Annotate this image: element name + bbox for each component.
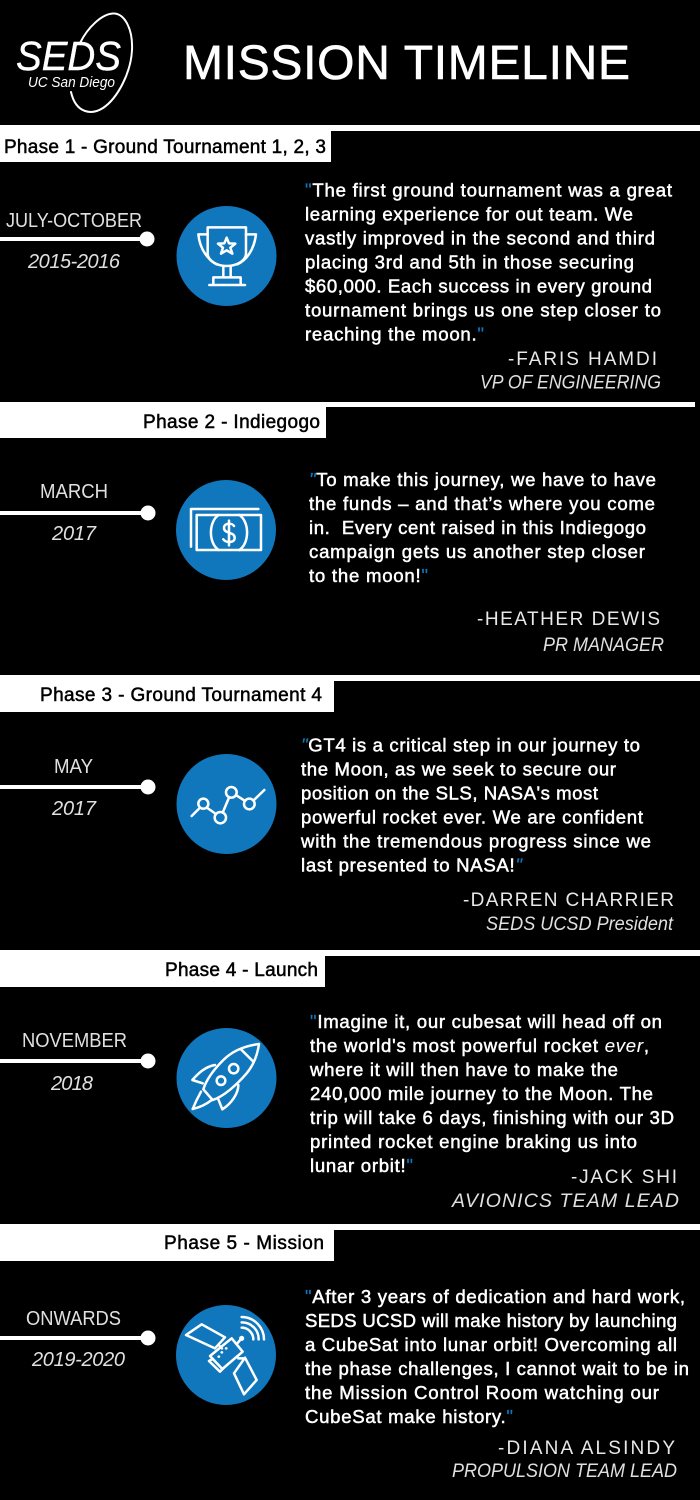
phase 2 quote: campaign gets us another step closer: [309, 541, 645, 562]
icon: rocket: [176, 1028, 276, 1128]
phase 3 heading bar: [0, 675, 700, 712]
panel: phase 2: [0, 402, 695, 656]
phase 5 quote: the Mission Control Room watching our: [305, 1382, 659, 1403]
phase 2 quote: [309, 469, 656, 586]
phase 5 quote: a CubeSat into lunar orbit! Overcoming all: [305, 1334, 677, 1355]
phase 3 quote: powerful rocket ever. We are confident: [301, 806, 644, 828]
phase 4 attribution: -JACK SHI: [571, 1167, 677, 1188]
icon: line chart: [176, 754, 276, 854]
phase 4 quote: [309, 1011, 674, 1176]
phase 3 quote: with the tremendous progress since we: [300, 830, 651, 852]
phase 2 attribution: -HEATHER DEWIS: [477, 609, 660, 630]
phase 4 quote: trip will take 6 days, finishing with our 3D: [310, 1107, 674, 1128]
phase 2 quote: "To make this journey, we have to have: [309, 469, 656, 490]
phase 5 attribution: -DIANA ALSINDY: [498, 1438, 675, 1459]
panel: phase 3: [0, 675, 700, 935]
phase 3 date marker: [0, 756, 156, 820]
phase 5 heading bar: Phase 5 - Mission: [164, 1233, 324, 1254]
phase 1 attribution: [480, 349, 661, 394]
phase 4 heading bar: Phase 4 - Launch: [165, 960, 318, 981]
phase 5 quote: [305, 1286, 689, 1427]
phase 1 quote: vastly improved in the second and third: [305, 228, 655, 248]
phase 1 quote: tournament brings us one step closer to: [305, 300, 661, 320]
phase 5 quote: CubeSat make history.": [305, 1406, 513, 1427]
phase 4 quote: 240,000 mile journey to the Moon. The: [310, 1083, 653, 1104]
phase 5 date marker: ONWARDS: [26, 1308, 121, 1330]
phase 2 quote: in. Every cent raised in this Indiegogo: [309, 517, 646, 538]
phase 4 quote: "Imagine it, our cubesat will head off on: [310, 1011, 662, 1032]
phase 4 quote: the world's most powerful rocket ever,: [310, 1035, 649, 1056]
phase 2 quote: to the moon!": [309, 565, 428, 586]
phase 1 quote: "The first ground tournament was a great: [305, 180, 673, 200]
phase 1 date marker: JULY-OCTOBER: [6, 210, 142, 232]
phase 2 date marker: [0, 481, 156, 545]
phase 3 date marker: MAY: [54, 756, 93, 778]
phase 5 heading bar: [0, 1224, 700, 1261]
phase 5 date marker: 2019-2020: [31, 1349, 125, 1371]
phase 3 attribution: [463, 890, 674, 935]
phase 5 date marker: [0, 1308, 156, 1371]
phase 2 date marker: 2017: [51, 523, 97, 545]
phase 1 quote: $60,000. Each success in every ground: [305, 276, 652, 296]
phase 2 date marker: MARCH: [40, 481, 108, 503]
panel: phase 4: [0, 950, 700, 1212]
phase 4 quote: where it will then have to make the: [309, 1059, 618, 1080]
phase 2 heading bar: [0, 402, 695, 438]
phase 1 date marker: 2015-2016: [27, 251, 121, 273]
phase 4 quote: printed rocket engine braking us into: [310, 1131, 637, 1152]
phase 3 quote: last presented to NASA!": [301, 854, 523, 876]
phase 5 attribution: [452, 1438, 677, 1482]
phase 2 quote: the funds – and that’s where you come: [309, 493, 655, 514]
phase 3 attribution: -DARREN CHARRIER: [463, 890, 674, 911]
phase 1 attribution: VP OF ENGINEERING: [480, 372, 661, 394]
icon: money: [176, 480, 276, 580]
phase 1 heading bar: [0, 125, 700, 162]
logo: SEDS UC San Diego: UC San Diego: [28, 74, 115, 91]
phase 5 attribution: PROPULSION TEAM LEAD: [452, 1460, 677, 1482]
phase 4 quote: lunar orbit!": [310, 1155, 413, 1176]
phase 4 date marker: [0, 1030, 156, 1095]
phase 1 date marker: [0, 210, 154, 273]
phase 2 attribution: PR MANAGER: [543, 634, 664, 656]
panel: phase 5: [0, 1224, 700, 1482]
phase 4 attribution: [451, 1167, 679, 1212]
phase 5 quote: SEDS UCSD will make history by launching: [305, 1310, 677, 1331]
phase 3 quote: position on the SLS, NASA's most: [301, 782, 599, 804]
phase 2 attribution: [477, 609, 664, 656]
phase 1 quote: reaching the moon.": [305, 324, 484, 344]
phase 3 quote: the Moon, as we seek to secure our: [301, 758, 616, 780]
icon: satellite: [176, 1305, 276, 1405]
phase 3 quote: [300, 734, 651, 876]
phase 3 attribution: SEDS UCSD President: [486, 913, 674, 935]
phase 5 quote: "After 3 years of dedication and hard work,: [305, 1286, 685, 1307]
phase 1 quote: placing 3rd and 5th in those securing: [305, 252, 634, 272]
panel: phase 1: [0, 125, 700, 394]
phase 1 quote: learning experience for out team. We: [305, 204, 633, 224]
phase 1 quote: [305, 180, 673, 344]
phase 4 date marker: NOVEMBER: [22, 1030, 127, 1052]
phase 1 heading bar: Phase 1 - Ground Tournament 1, 2, 3: [4, 137, 326, 158]
phase 1 attribution: -FARIS HAMDI: [508, 349, 657, 370]
phase 4 heading bar: [0, 950, 700, 987]
phase 4 attribution: AVIONICS TEAM LEAD: [451, 1190, 679, 1212]
phase 5 quote: the phase challenges, I cannot wait to be in: [305, 1358, 689, 1379]
title: MISSION TIMELINE: [183, 37, 630, 90]
phase 3 date marker: 2017: [51, 798, 97, 820]
icon: trophy: [176, 206, 276, 306]
logo: SEDS UC San Diego: SEDS: [16, 33, 121, 79]
phase 3 heading bar: Phase 3 - Ground Tournament 4: [40, 685, 322, 706]
logo: SEDS UC San Diego: [16, 13, 132, 112]
phase 3 quote: "GT4 is a critical step in our journey to: [301, 734, 640, 756]
phase 2 heading bar: Phase 2 - Indiegogo: [143, 412, 320, 433]
phase 4 date marker: 2018: [50, 1073, 93, 1095]
